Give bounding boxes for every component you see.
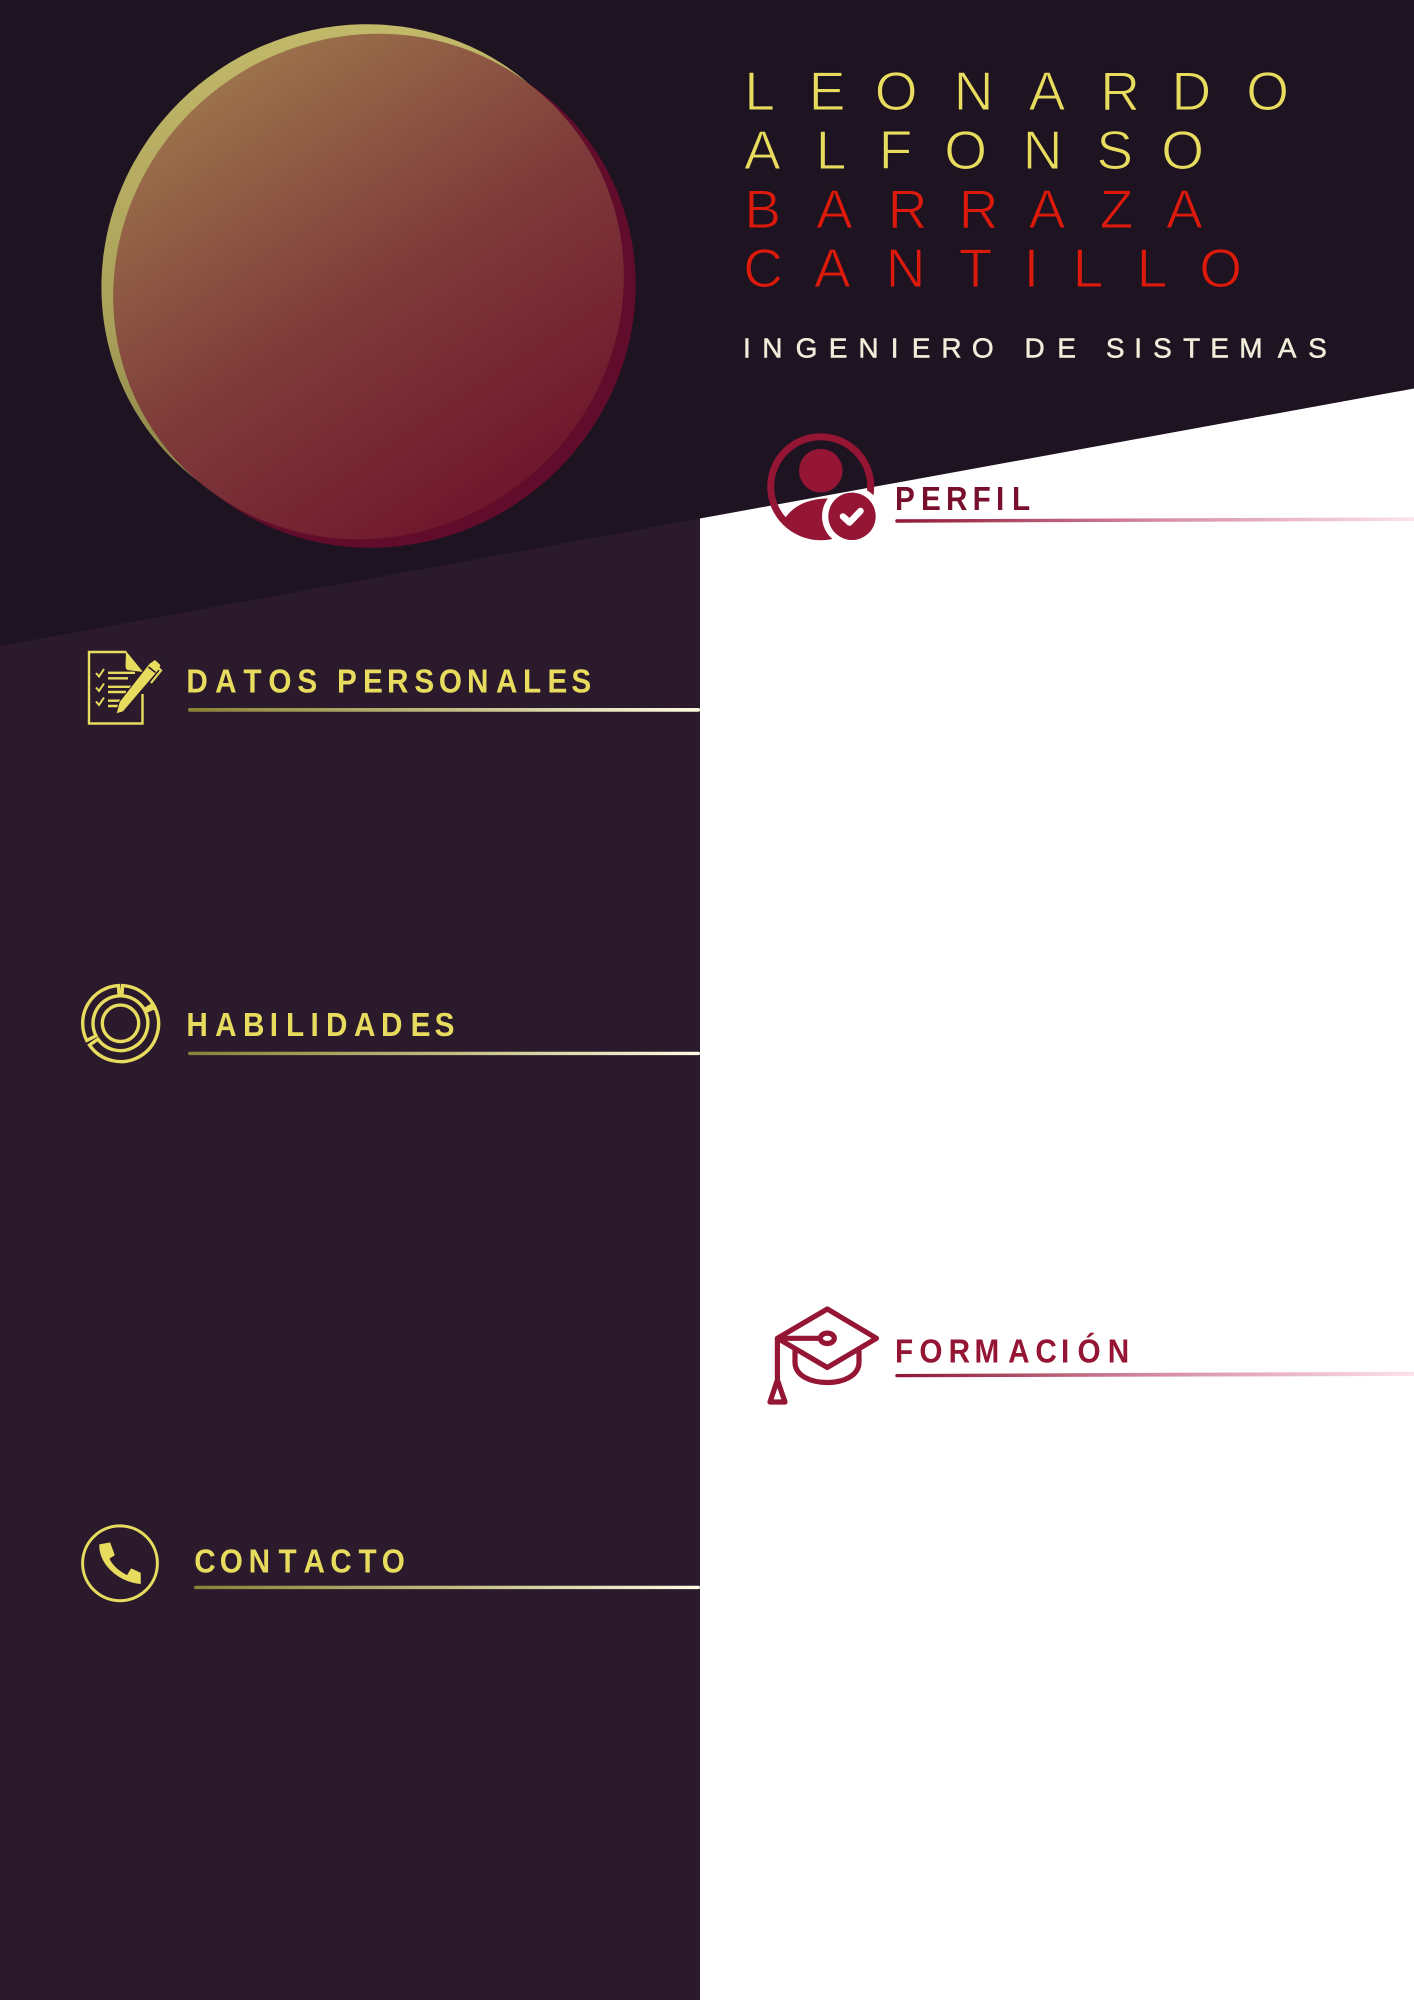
title: name: CANTILLO — [743, 237, 1242, 299]
title: name — [743, 60, 1289, 299]
icon: graduation cap — [770, 1309, 876, 1402]
subtitle: profession: INGENIERO DE SISTEMAS — [743, 332, 1327, 364]
heading: perfil: PERFIL — [895, 481, 1030, 517]
heading: formacion: FORMACIÓN — [895, 1332, 1129, 1370]
title: name: LEONARDO — [744, 60, 1289, 122]
heading: contacto: CONTACTO — [194, 1543, 405, 1580]
icon: concentric ring chart — [83, 986, 159, 1062]
heading: datos personales: DATOS PERSONALES — [186, 663, 591, 700]
panel: left sidebar — [0, 500, 700, 2000]
rule: perfil — [895, 517, 1414, 523]
panel: diagonal header — [0, 0, 1414, 646]
title: name: ALFONSO — [744, 119, 1204, 181]
heading: habilidades: HABILIDADES — [186, 1007, 454, 1043]
photo circle — [0, 0, 741, 652]
rule: formacion — [895, 1372, 1414, 1377]
rule: habilidades — [188, 1052, 700, 1055]
icon: checklist and pencil — [89, 651, 161, 724]
title: name: BARRAZA — [744, 178, 1203, 240]
icon: phone — [83, 1526, 157, 1601]
rule: datos personales — [188, 708, 700, 712]
rule: contacto — [194, 1586, 700, 1589]
icon: person with check badge — [770, 437, 876, 545]
